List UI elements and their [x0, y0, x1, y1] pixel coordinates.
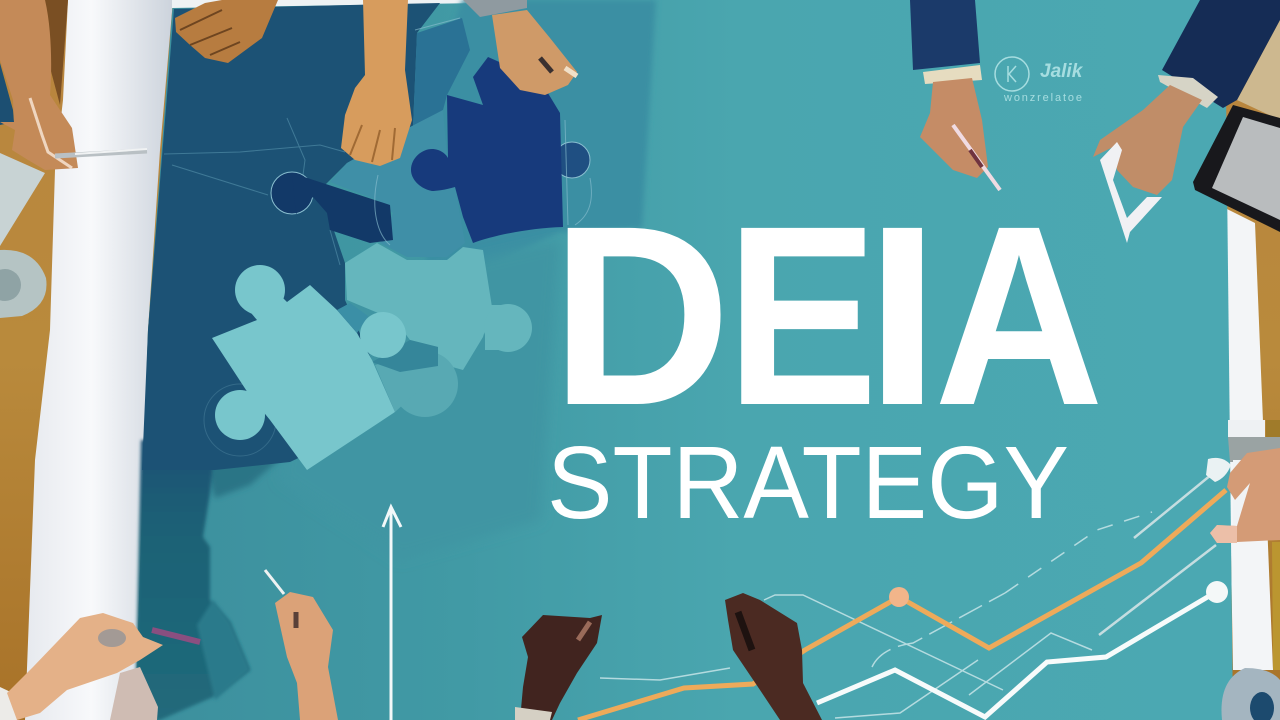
chart point markers	[889, 458, 1231, 607]
puzzle piece: light teal	[212, 265, 406, 470]
top hand: fist with finger lines	[175, 0, 278, 63]
board shading: dark navy panel	[142, 3, 440, 470]
upward arrow	[383, 507, 401, 720]
puzzle piece: translucent teal	[345, 243, 532, 370]
board shading: medium upper panel	[400, 0, 656, 290]
top hand: grey sleeve and hand	[463, 0, 577, 95]
subtitle: STRATEGY: STRATEGY	[547, 425, 1069, 540]
chart: orange series	[578, 490, 1226, 720]
beige area under the top right sleeve	[1237, 20, 1280, 120]
rolled white paper on the left	[25, 0, 173, 720]
tablet	[1193, 105, 1280, 232]
puzzle piece: dark navy	[271, 172, 393, 243]
folded white paper	[1100, 142, 1162, 243]
top hand: arm reaching in	[341, 0, 412, 166]
board shading: lower teal wash	[280, 240, 560, 560]
puzzle piece: dark blue	[411, 57, 590, 243]
main title: DEIA: E	[726, 173, 878, 459]
shadow under the translucent piece	[372, 340, 438, 372]
main title: DEIA: I	[865, 173, 940, 459]
bottom left hand with pen	[0, 613, 200, 720]
faint construction lines on the dark panel	[164, 118, 345, 265]
bottom dark hand with pen	[725, 593, 822, 720]
board shading: lower left dark bands	[135, 440, 290, 720]
chart: thin sketch lines	[600, 512, 1152, 718]
glass at left edge	[0, 250, 46, 318]
puzzle graphic	[204, 18, 591, 470]
chart: grey-white rising lines	[1099, 470, 1217, 635]
glass at bottom right	[1221, 668, 1280, 720]
white paper edge at top of board	[172, 0, 480, 8]
white paper strip on the right	[1225, 208, 1273, 670]
dark wood gap at top left	[45, 0, 68, 105]
main title: DEIA: D	[551, 173, 731, 459]
paper at left edge	[0, 153, 45, 246]
chart: thick white series	[817, 592, 1216, 717]
puzzle piece: lower circle tab	[375, 351, 458, 417]
small logo mark top right	[995, 57, 1084, 104]
top right: second sleeve and hand	[1093, 0, 1280, 195]
gap between puzzle pieces	[337, 303, 368, 333]
small logo mark top right: wonzrelatoe	[1003, 92, 1082, 104]
top-left arm and hand with pencil	[0, 0, 147, 170]
puzzle outlines	[204, 18, 591, 456]
right hand holding chart	[1210, 448, 1280, 543]
line chart	[578, 470, 1226, 720]
dark board corner at left edge	[0, 63, 14, 125]
main title: DEIA: A	[934, 173, 1104, 459]
board shading: wedge near top hands	[413, 18, 470, 127]
top right: navy sleeve and hand with pen	[910, 0, 1000, 190]
bottom dark hand	[515, 615, 602, 720]
bottom hand with stylus	[265, 570, 338, 720]
puzzle piece: mid teal	[330, 110, 465, 257]
small logo mark top right: Jalik	[1040, 61, 1084, 82]
right side paper corner and wood	[1228, 420, 1280, 670]
